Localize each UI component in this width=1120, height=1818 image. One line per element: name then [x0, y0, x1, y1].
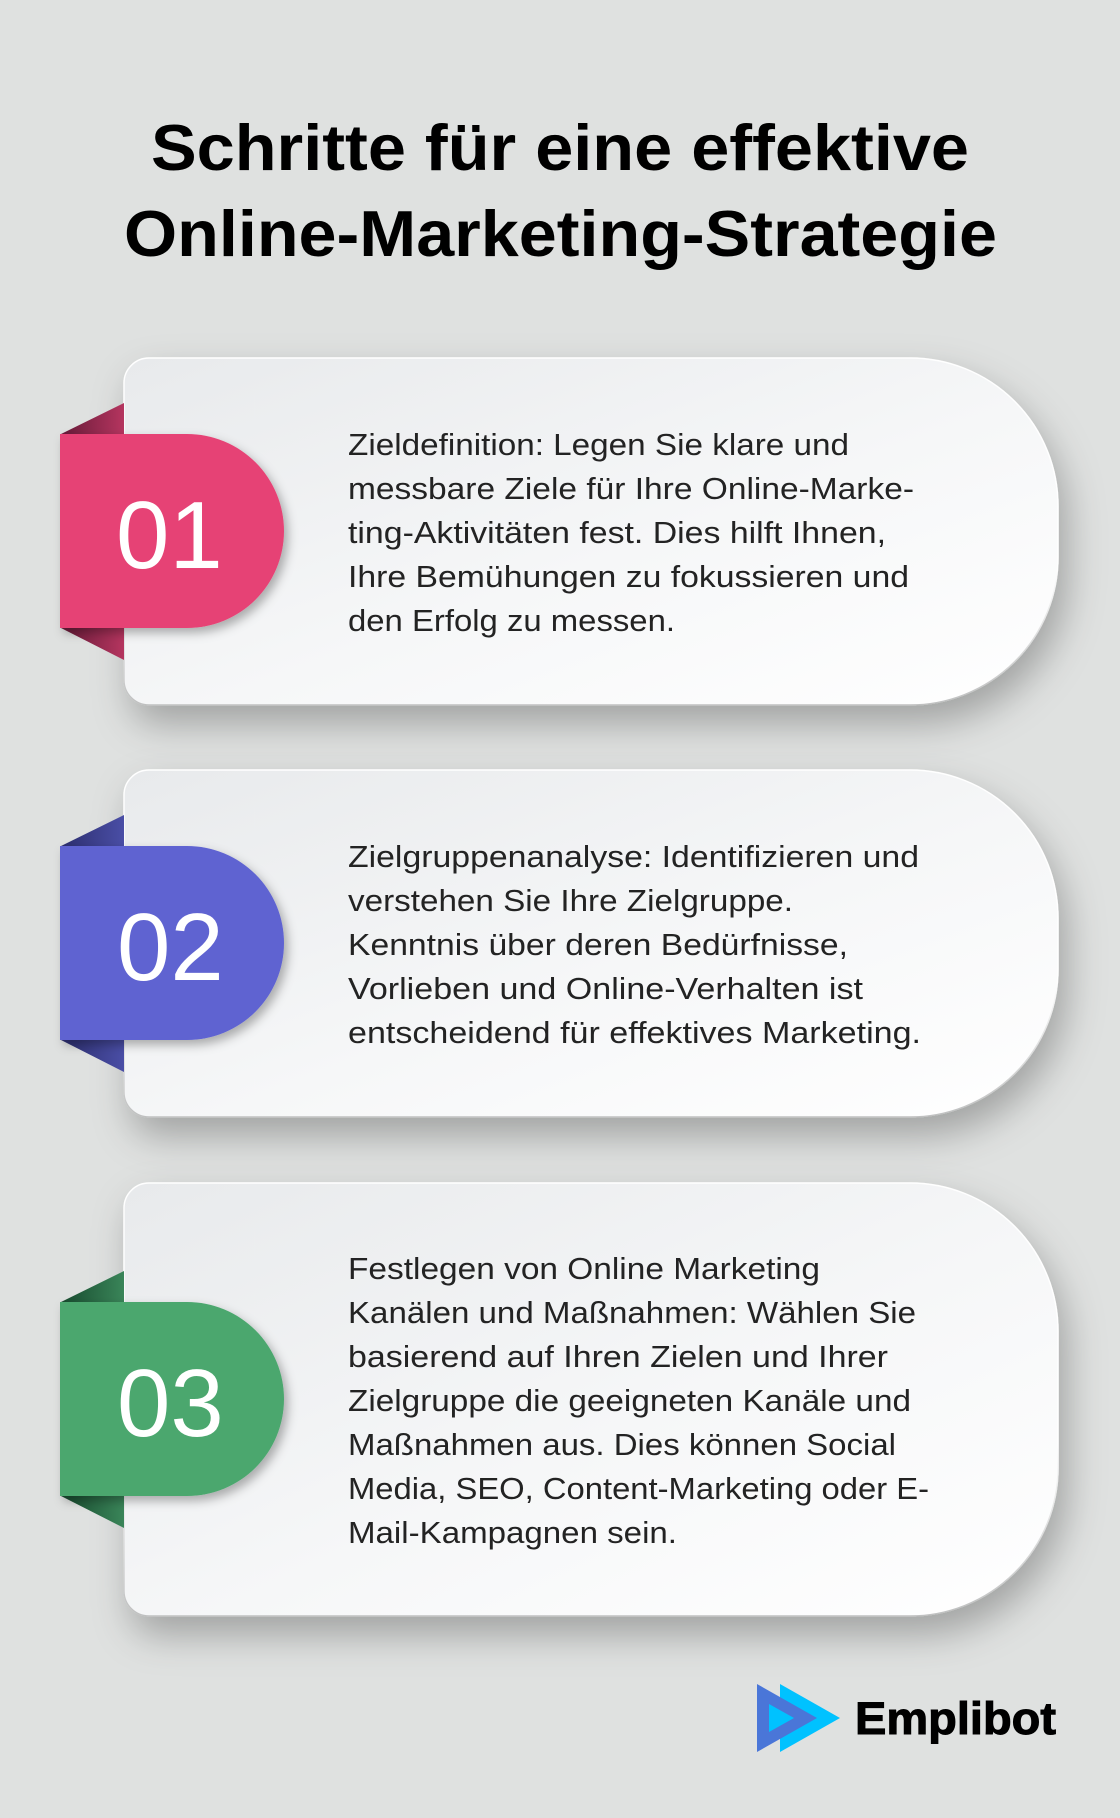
number 03: 03	[117, 1350, 224, 1457]
text 1: Zieldefinition: Legen Sie klare und	[348, 427, 849, 462]
text 1	[348, 427, 914, 638]
text 3	[348, 1251, 929, 1550]
ribbon 2	[61, 815, 124, 1072]
ribbon 3	[61, 1271, 124, 1528]
text 3: Kanälen und Maßnahmen: Wählen Sie	[348, 1295, 916, 1330]
ribbon 1	[61, 403, 124, 660]
number 01: 01	[116, 482, 223, 589]
title	[124, 111, 997, 270]
number 02: 02	[117, 894, 224, 1001]
badge 3	[60, 1302, 284, 1496]
panel: step 3	[60, 1183, 1058, 1616]
text 3: Maßnahmen aus. Dies können Social	[348, 1427, 896, 1462]
text 2: entscheidend für effektives Marketing.	[348, 1015, 921, 1050]
text 1: den Erfolg zu messen.	[348, 603, 675, 638]
text 1: messbare Ziele für Ihre Online-Marke-	[348, 471, 914, 506]
text 3: Zielgruppe die geeigneten Kanäle und	[348, 1383, 911, 1418]
text 2: Vorlieben und Online-Verhalten ist	[348, 971, 863, 1006]
card 2	[124, 770, 1058, 1117]
text 1: ting-Aktivitäten fest. Dies hilft Ihnen,	[348, 515, 886, 550]
text 2: Kenntnis über deren Bedürfnisse,	[348, 927, 848, 962]
badge 1	[60, 434, 284, 628]
wordmark: Emplibot	[855, 1693, 1056, 1744]
card 1	[124, 358, 1058, 705]
text 1: Ihre Bemühungen zu fokussieren und	[348, 559, 909, 594]
title: Online-Marketing-Strategie	[124, 197, 997, 270]
text 3: Festlegen von Online Marketing	[348, 1251, 820, 1286]
text 3: basierend auf Ihren Zielen und Ihrer	[348, 1339, 888, 1374]
card 3	[124, 1183, 1058, 1616]
text 2: Zielgruppenanalyse: Identifizieren und	[348, 839, 919, 874]
title: Schritte für eine effektive	[151, 111, 969, 184]
panel: step 2	[60, 770, 1058, 1117]
panel: step 1	[60, 358, 1058, 705]
text 3: Media, SEO, Content-Marketing oder E-	[348, 1471, 929, 1506]
icon: play triangles	[757, 1684, 840, 1752]
badge 2	[60, 846, 284, 1040]
text 3: Mail-Kampagnen sein.	[348, 1515, 677, 1550]
logo: Emplibot	[757, 1684, 1056, 1752]
text 2: verstehen Sie Ihre Zielgruppe.	[348, 883, 793, 918]
text 2	[348, 839, 921, 1050]
